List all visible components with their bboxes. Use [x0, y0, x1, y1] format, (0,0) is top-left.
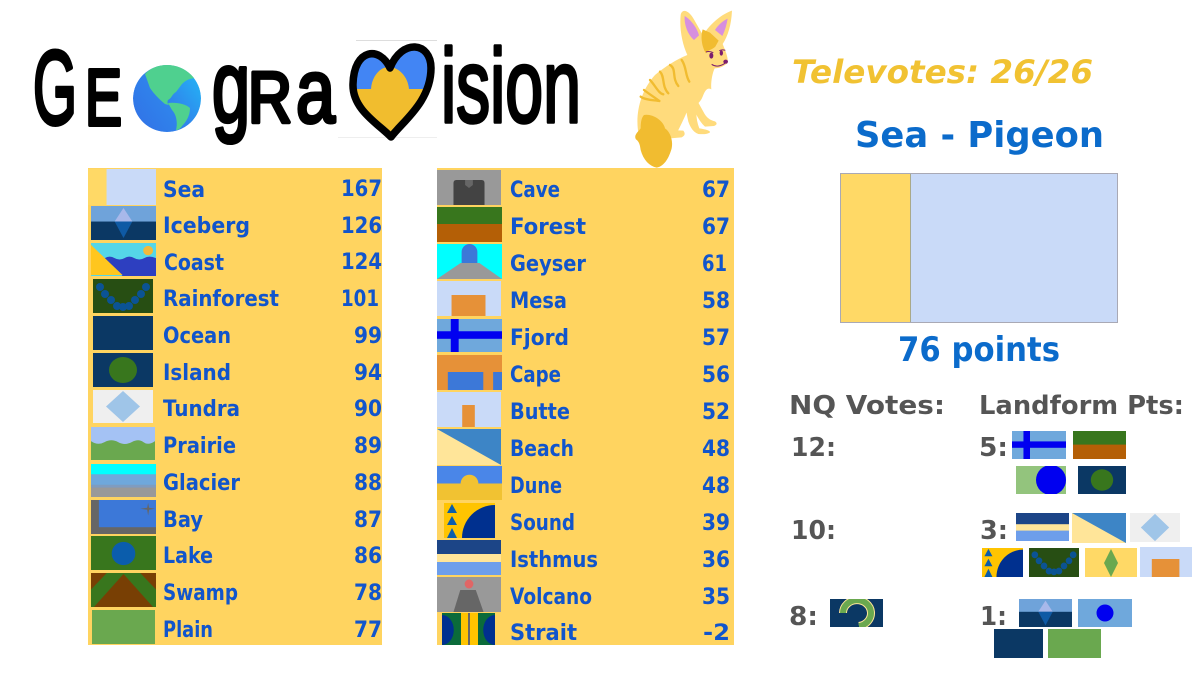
fox front leg	[685, 100, 710, 134]
flag: Beach	[1072, 513, 1126, 543]
row: Strait	[442, 613, 730, 646]
flag: Isthmus	[1016, 513, 1069, 541]
logo letters Ge: E	[85, 53, 122, 142]
3 points label: 3:	[980, 516, 1008, 546]
flag: Rainforest	[1029, 548, 1079, 577]
row: Plain: Plain	[163, 618, 213, 643]
fox body and head	[637, 11, 732, 140]
flag: 8 point vote	[830, 599, 883, 627]
row: Iceberg: 126	[341, 214, 382, 239]
fox face	[706, 50, 728, 66]
row: Lake	[91, 536, 382, 570]
row: Cave	[437, 170, 730, 205]
row: Plain	[92, 610, 382, 644]
row: Sea: 167	[341, 177, 382, 202]
row: Iceberg: Iceberg	[163, 214, 250, 239]
row: Rainforest: 101	[341, 287, 379, 312]
panel: ranking left column	[88, 168, 382, 645]
row: Tundra: 90	[354, 397, 382, 422]
row: Beach: 48	[702, 437, 730, 462]
landform points heading: Landform Pts:	[979, 391, 1184, 421]
row: Butte	[437, 392, 730, 427]
row: Bay: 87	[354, 508, 382, 533]
row: Cave: 67	[702, 178, 730, 203]
1 point label: 1:	[980, 602, 1007, 632]
row: Tundra: Tundra	[163, 397, 240, 422]
panel background left	[88, 168, 382, 645]
points total: 76 points	[898, 330, 1060, 370]
logo letters Ge: G	[33, 30, 77, 147]
panel: NQ votes	[789, 391, 945, 632]
row: Glacier: 88	[354, 471, 382, 496]
row: Glacier	[91, 464, 382, 497]
row: Swamp	[91, 573, 382, 607]
row: Volcano	[437, 577, 730, 612]
10 points label: 10:	[791, 516, 836, 546]
row: Sound: Sound	[510, 511, 575, 536]
row: Coast: Coast	[164, 251, 224, 276]
row: Geyser	[437, 244, 727, 279]
row: Beach: Beach	[510, 437, 574, 462]
row: Geyser: Geyser	[510, 252, 586, 277]
flag: Forest	[1073, 431, 1126, 459]
flag: Plain	[1048, 629, 1101, 658]
flag: green diamond on yellow	[1085, 548, 1137, 577]
icon: fennec fox mascot	[635, 11, 732, 168]
row: Prairie	[91, 427, 382, 460]
row: Forest	[437, 207, 730, 242]
row: Volcano: Volcano	[510, 585, 592, 610]
row: Island: Island	[163, 361, 231, 386]
row: Swamp: Swamp	[163, 581, 238, 606]
flag: Sound	[982, 548, 1023, 577]
row: Volcano: 35	[702, 585, 730, 610]
row: Sea	[88, 169, 382, 205]
flag: Tundra	[1130, 513, 1180, 542]
row: Forest: Forest	[510, 215, 586, 240]
row: Sea: Sea	[163, 178, 205, 203]
icon: Ukraine coloured heart	[338, 38, 437, 140]
row: Tundra	[93, 390, 382, 423]
row: Cape: 56	[702, 363, 730, 388]
title: GeograVision logo	[34, 40, 578, 145]
row: Geyser: 61	[702, 252, 727, 277]
flag: Mesa	[1140, 547, 1192, 577]
row: Strait: Strait	[510, 621, 577, 646]
logo letters gra	[212, 30, 336, 144]
flag: Fjord	[1012, 431, 1066, 459]
row: Island: 94	[354, 361, 382, 386]
televotes counter: Televotes: 26/26	[792, 53, 1093, 91]
ear inner left	[685, 16, 699, 40]
8 points label: 8:	[789, 602, 818, 632]
row: Cave: Cave	[510, 178, 560, 203]
5 points label: 5:	[979, 433, 1008, 463]
row: Fjord: Fjord	[510, 326, 569, 351]
NQ votes heading: NQ Votes:	[789, 391, 945, 421]
row: Rainforest	[93, 279, 379, 313]
row: Coast: 124	[341, 250, 382, 275]
row: Mesa	[437, 281, 730, 316]
fox tail	[635, 115, 672, 168]
logo letters gra: R	[248, 58, 292, 138]
row: Dune: Dune	[510, 474, 562, 499]
fox stripes	[641, 60, 689, 101]
flag: Iceberg	[1019, 599, 1072, 627]
row: Sound: 39	[702, 511, 730, 536]
flag: blue circle on green	[1016, 465, 1066, 495]
row: Lake: Lake	[163, 544, 213, 569]
row: Butte: Butte	[510, 400, 570, 425]
row: Mesa: Mesa	[510, 289, 567, 314]
flag: blue dot	[1078, 599, 1132, 627]
logo letters ision: ision	[441, 28, 581, 145]
row: Swamp: 78	[354, 581, 382, 606]
panel: ranking right column	[437, 168, 734, 646]
row: Mesa: 58	[702, 289, 730, 314]
row: Bay	[91, 500, 382, 534]
row: Iceberg	[91, 206, 382, 240]
row: Glacier: Glacier	[163, 471, 240, 496]
row: Ocean: Ocean	[163, 324, 231, 349]
row: Dune: 48	[702, 474, 730, 499]
row: Cape	[437, 355, 730, 390]
row: Ocean: 99	[354, 324, 382, 349]
row: Plain: 77	[354, 618, 382, 643]
ear inner right	[715, 19, 728, 36]
row: Butte: 52	[702, 400, 730, 425]
row: Beach	[437, 429, 730, 465]
row: Dune	[437, 466, 730, 500]
row: Ocean	[93, 316, 382, 350]
row: Forest: 67	[702, 215, 730, 240]
row: Prairie: 89	[354, 434, 382, 459]
head crest	[702, 29, 719, 53]
row: Isthmus	[437, 540, 730, 575]
current vote heading: Sea - Pigeon	[855, 115, 1104, 156]
row: Island	[93, 353, 382, 387]
icon: globe	[133, 64, 201, 132]
12 points label: 12:	[791, 433, 836, 463]
row: Bay: Bay	[163, 508, 203, 533]
row: Prairie: Prairie	[163, 434, 236, 459]
flag: Ocean	[994, 629, 1043, 658]
panel background right	[437, 168, 734, 645]
fox hind foot	[670, 130, 685, 138]
fox back front leg	[695, 97, 717, 127]
flag: Island	[1078, 466, 1126, 494]
logo letters gra: a	[296, 42, 336, 142]
row: Sound	[444, 503, 730, 538]
row: Isthmus: 36	[702, 548, 730, 573]
row: Lake: 86	[354, 544, 382, 569]
row: Isthmus: Isthmus	[510, 548, 598, 573]
logo letters gra: g	[212, 30, 250, 144]
row: Fjord	[437, 319, 730, 352]
row: Cape: Cape	[510, 363, 561, 388]
row: Fjord: 57	[702, 326, 730, 351]
panel: landform points	[979, 391, 1192, 658]
row: Coast	[91, 243, 382, 276]
row: Strait: -2	[703, 621, 730, 646]
large Sea flag	[840, 174, 1118, 322]
row: Rainforest: Rainforest	[163, 287, 279, 312]
